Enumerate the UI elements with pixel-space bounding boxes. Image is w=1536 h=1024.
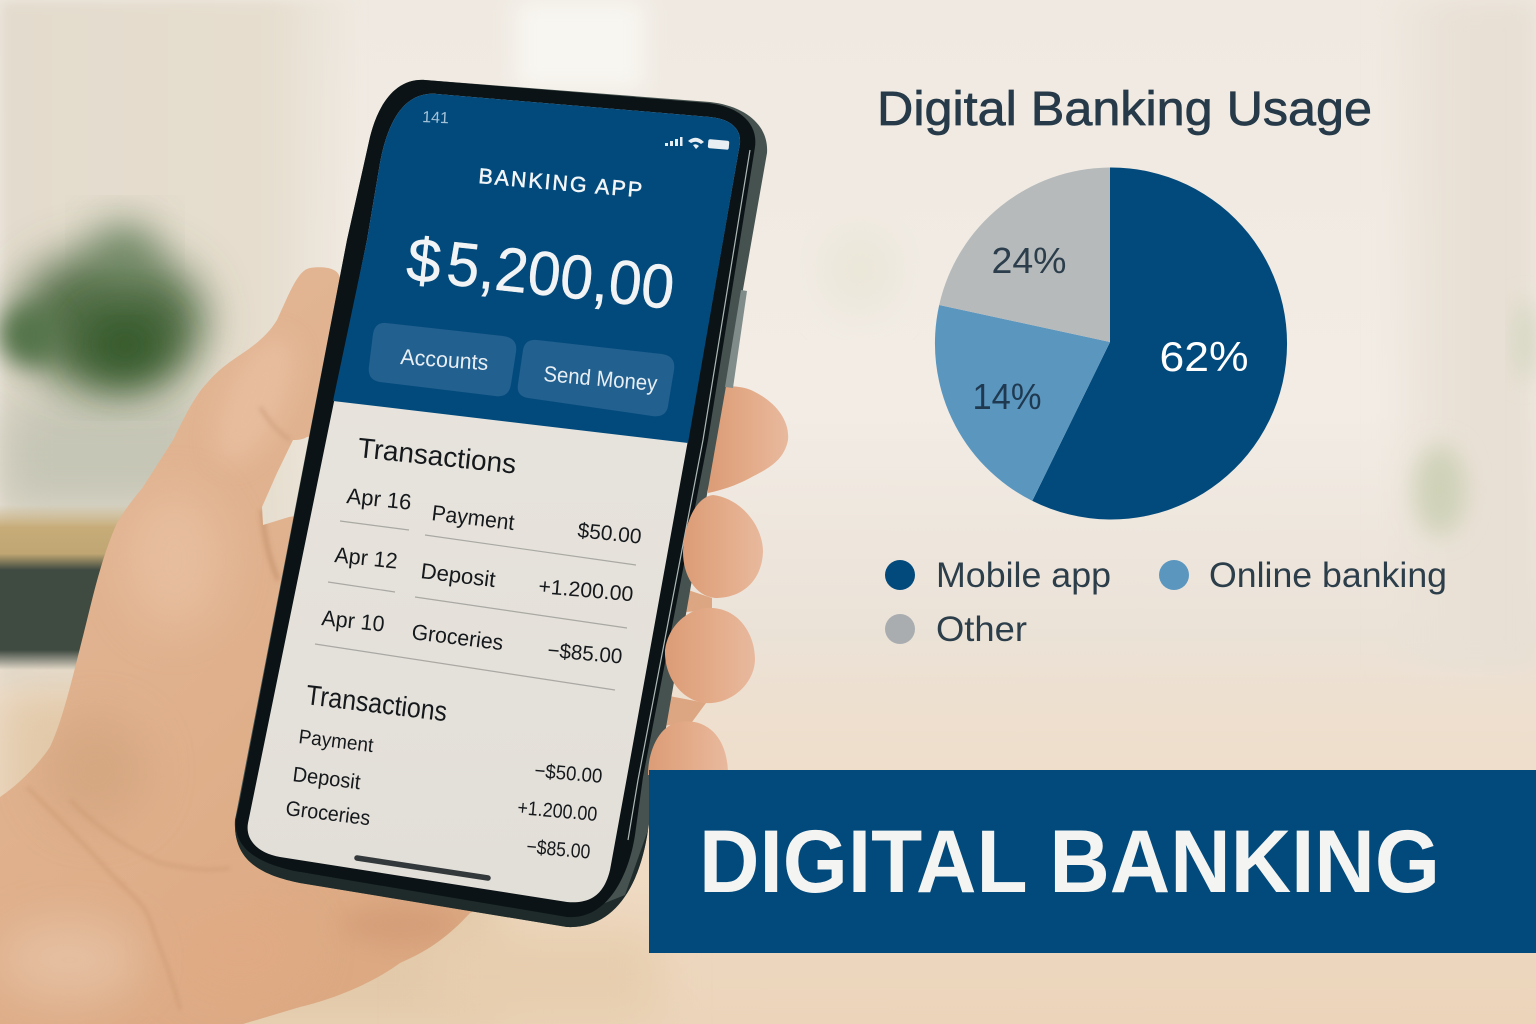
hand: index finger behind phone: [708, 385, 788, 493]
transactions list one: −$85.00: [547, 639, 623, 669]
transaction divider lines: [315, 521, 636, 690]
legend: other: [885, 610, 1027, 649]
app title: BANKING APP: [478, 164, 643, 202]
transactions list two: Deposit: [291, 763, 362, 794]
transactions list two: Transactions: [304, 679, 449, 727]
slice: mobile app 62%: [1032, 167, 1287, 519]
transactions list two: −$50.00: [534, 760, 603, 788]
transactions list one: Payment: [430, 500, 516, 535]
pie chart: [935, 167, 1287, 519]
transactions list one: +1.200.00: [538, 575, 634, 606]
transactions list two: [284, 679, 603, 864]
slice: online banking 14%: [935, 305, 1110, 501]
legend: online banking: Online banking: [1209, 556, 1447, 595]
legend: mobile app: Mobile app: [936, 556, 1111, 595]
chart title: Digital Banking Usage: [877, 83, 1372, 136]
label 24%: 24%: [992, 240, 1066, 281]
button: send money: Send Money: [543, 361, 658, 396]
legend: [885, 556, 1447, 649]
transactions list two: +1.200.00: [517, 797, 598, 826]
side button: [725, 290, 747, 388]
button: accounts: Accounts: [400, 344, 489, 375]
transactions list one: Apr 12: [333, 542, 399, 574]
phone screen: [248, 94, 740, 902]
account balance: 5,200,00: [443, 229, 678, 323]
transactions list two: −$85.00: [526, 836, 591, 864]
phone black bezel: [236, 80, 755, 917]
hand: little finger: [648, 721, 728, 775]
hand: middle finger: [683, 495, 763, 598]
transactions list one: Deposit: [419, 558, 497, 592]
home indicator: [357, 858, 488, 878]
button: send money: [518, 340, 674, 416]
label 62%: 62%: [1160, 333, 1248, 380]
account balance: $: [404, 225, 445, 297]
banner heading: DIGITAL BANKING: [699, 811, 1440, 911]
hand shading: [0, 324, 460, 1010]
button: accounts: [369, 323, 516, 396]
transactions list one: $50.00: [576, 519, 643, 549]
phone: [235, 80, 767, 927]
phone metal frame: [235, 80, 767, 927]
hand: webbing between fingers: [655, 590, 712, 727]
status time: 141: [422, 109, 449, 127]
transactions list one: Transactions: [356, 432, 518, 480]
status icons: [665, 137, 729, 150]
transactions list one: [320, 432, 643, 669]
transactions list one: Apr 10: [320, 605, 386, 637]
transactions list two: Payment: [297, 726, 375, 757]
slice: other 24%: [939, 168, 1110, 342]
label 14%: 14%: [972, 376, 1042, 417]
banner: [649, 770, 1536, 953]
transactions list one: Groceries: [410, 619, 505, 655]
hand: ring finger: [665, 608, 755, 703]
screen header blue area: [333, 94, 740, 443]
legend: other: Other: [936, 610, 1027, 649]
hand: palm and thumb: [0, 267, 500, 1024]
transactions list two: Groceries: [284, 797, 372, 830]
transactions list one: Apr 16: [345, 483, 413, 515]
